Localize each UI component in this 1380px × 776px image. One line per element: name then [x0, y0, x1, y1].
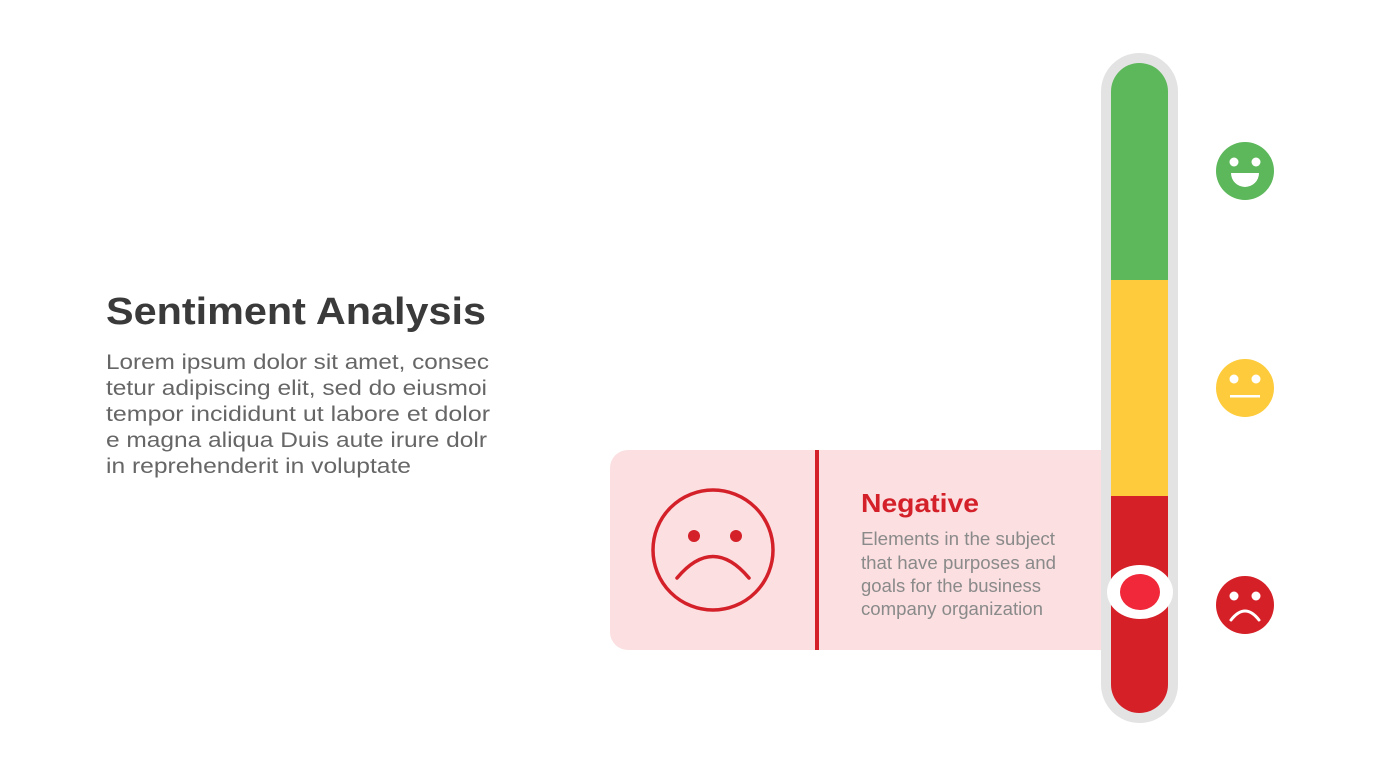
slider knob [1107, 565, 1173, 619]
panel: negative card [610, 450, 1105, 650]
card description [861, 529, 1056, 619]
card description: company organization [861, 599, 1043, 619]
icon: happy face [1216, 142, 1274, 200]
heading: Negative: Negative [861, 488, 979, 518]
body text: Lorem ipsum dolor sit amet, consec [106, 351, 489, 374]
body text: e magna aliqua Duis aute irure dolr [106, 429, 487, 452]
body text: in reprehenderit in voluptate [106, 455, 411, 478]
card description: that have purposes and [861, 553, 1056, 573]
body text: tempor incididunt ut labore et dolor [106, 403, 490, 426]
icon: sad face [1216, 576, 1274, 634]
icon: neutral face [1216, 359, 1274, 417]
icon: sad face outline [653, 490, 773, 610]
title: Sentiment Analysis [106, 291, 486, 333]
body text [106, 351, 490, 478]
card description: goals for the business [861, 576, 1041, 596]
card description: Elements in the subject [861, 529, 1055, 549]
body text: tetur adipiscing elit, sed do eiusmoi [106, 377, 487, 400]
sentiment bar [1101, 53, 1178, 723]
